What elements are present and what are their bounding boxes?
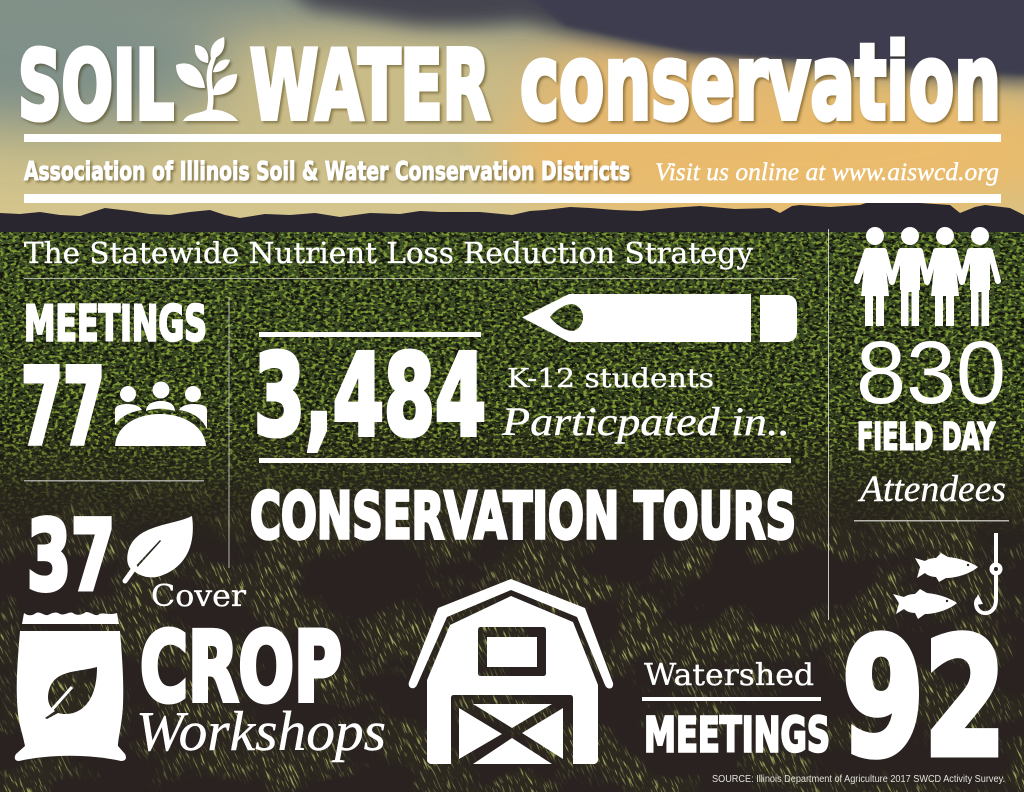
label: Cover: Cover	[151, 579, 247, 614]
column divider left	[228, 297, 230, 568]
icon: pencil	[522, 294, 797, 342]
panel: header	[18, 22, 1001, 203]
script: participated: Particpated in..	[501, 399, 790, 444]
panel: cover crop workshops	[15, 500, 386, 763]
number: 37: 37	[27, 500, 115, 612]
rule above tours	[259, 458, 791, 463]
icon: fish and hook	[893, 533, 1002, 619]
panel: meetings 77	[21, 296, 207, 482]
panel: field day	[854, 227, 1009, 522]
source note: SOURCE: Illinois Department of Agriculture 2017 SWCD Activity Survey.	[712, 774, 1005, 785]
icon: people around table	[115, 382, 207, 446]
divider	[854, 520, 1009, 522]
title: SOIL: SOIL	[18, 32, 174, 142]
column divider right	[828, 229, 829, 620]
rule	[642, 697, 821, 701]
header rule top	[24, 134, 1001, 142]
subtitle: strategy: The Statewide Nutrient Loss Reduction Strategy	[24, 236, 754, 270]
script: workshops: Workshops	[136, 701, 386, 763]
number: 3,484: 3,484	[254, 332, 486, 462]
label: Watershed: Watershed	[644, 658, 814, 693]
icon: barn	[409, 579, 613, 764]
header rule bottom	[24, 194, 1001, 203]
heading: CROP: CROP	[140, 612, 342, 724]
divider	[24, 480, 204, 482]
subtitle divider	[24, 278, 797, 279]
icon: leaf	[125, 516, 193, 581]
number: 830: 830	[856, 322, 1006, 422]
number: 77: 77	[21, 346, 105, 468]
icon: seed bag	[15, 612, 126, 761]
panel: students and conservation tours	[250, 294, 797, 554]
icon: plant sprout	[176, 37, 238, 121]
title: WATER: WATER	[250, 32, 490, 142]
organization name: Association of Illinois Soil & Water Conservation Districts	[24, 157, 630, 187]
script: attendees: Attendees	[857, 469, 1006, 510]
icon: four people holding hands	[857, 227, 998, 326]
panel: watershed meetings	[642, 533, 1006, 792]
heading: MEETINGS: MEETINGS	[644, 708, 830, 764]
heading: MEETINGS: MEETINGS	[24, 296, 207, 352]
label: K-12 students: K-12 students	[507, 364, 714, 394]
website line: Visit us online at www.aiswcd.org	[655, 159, 999, 186]
rule above number	[259, 332, 481, 337]
